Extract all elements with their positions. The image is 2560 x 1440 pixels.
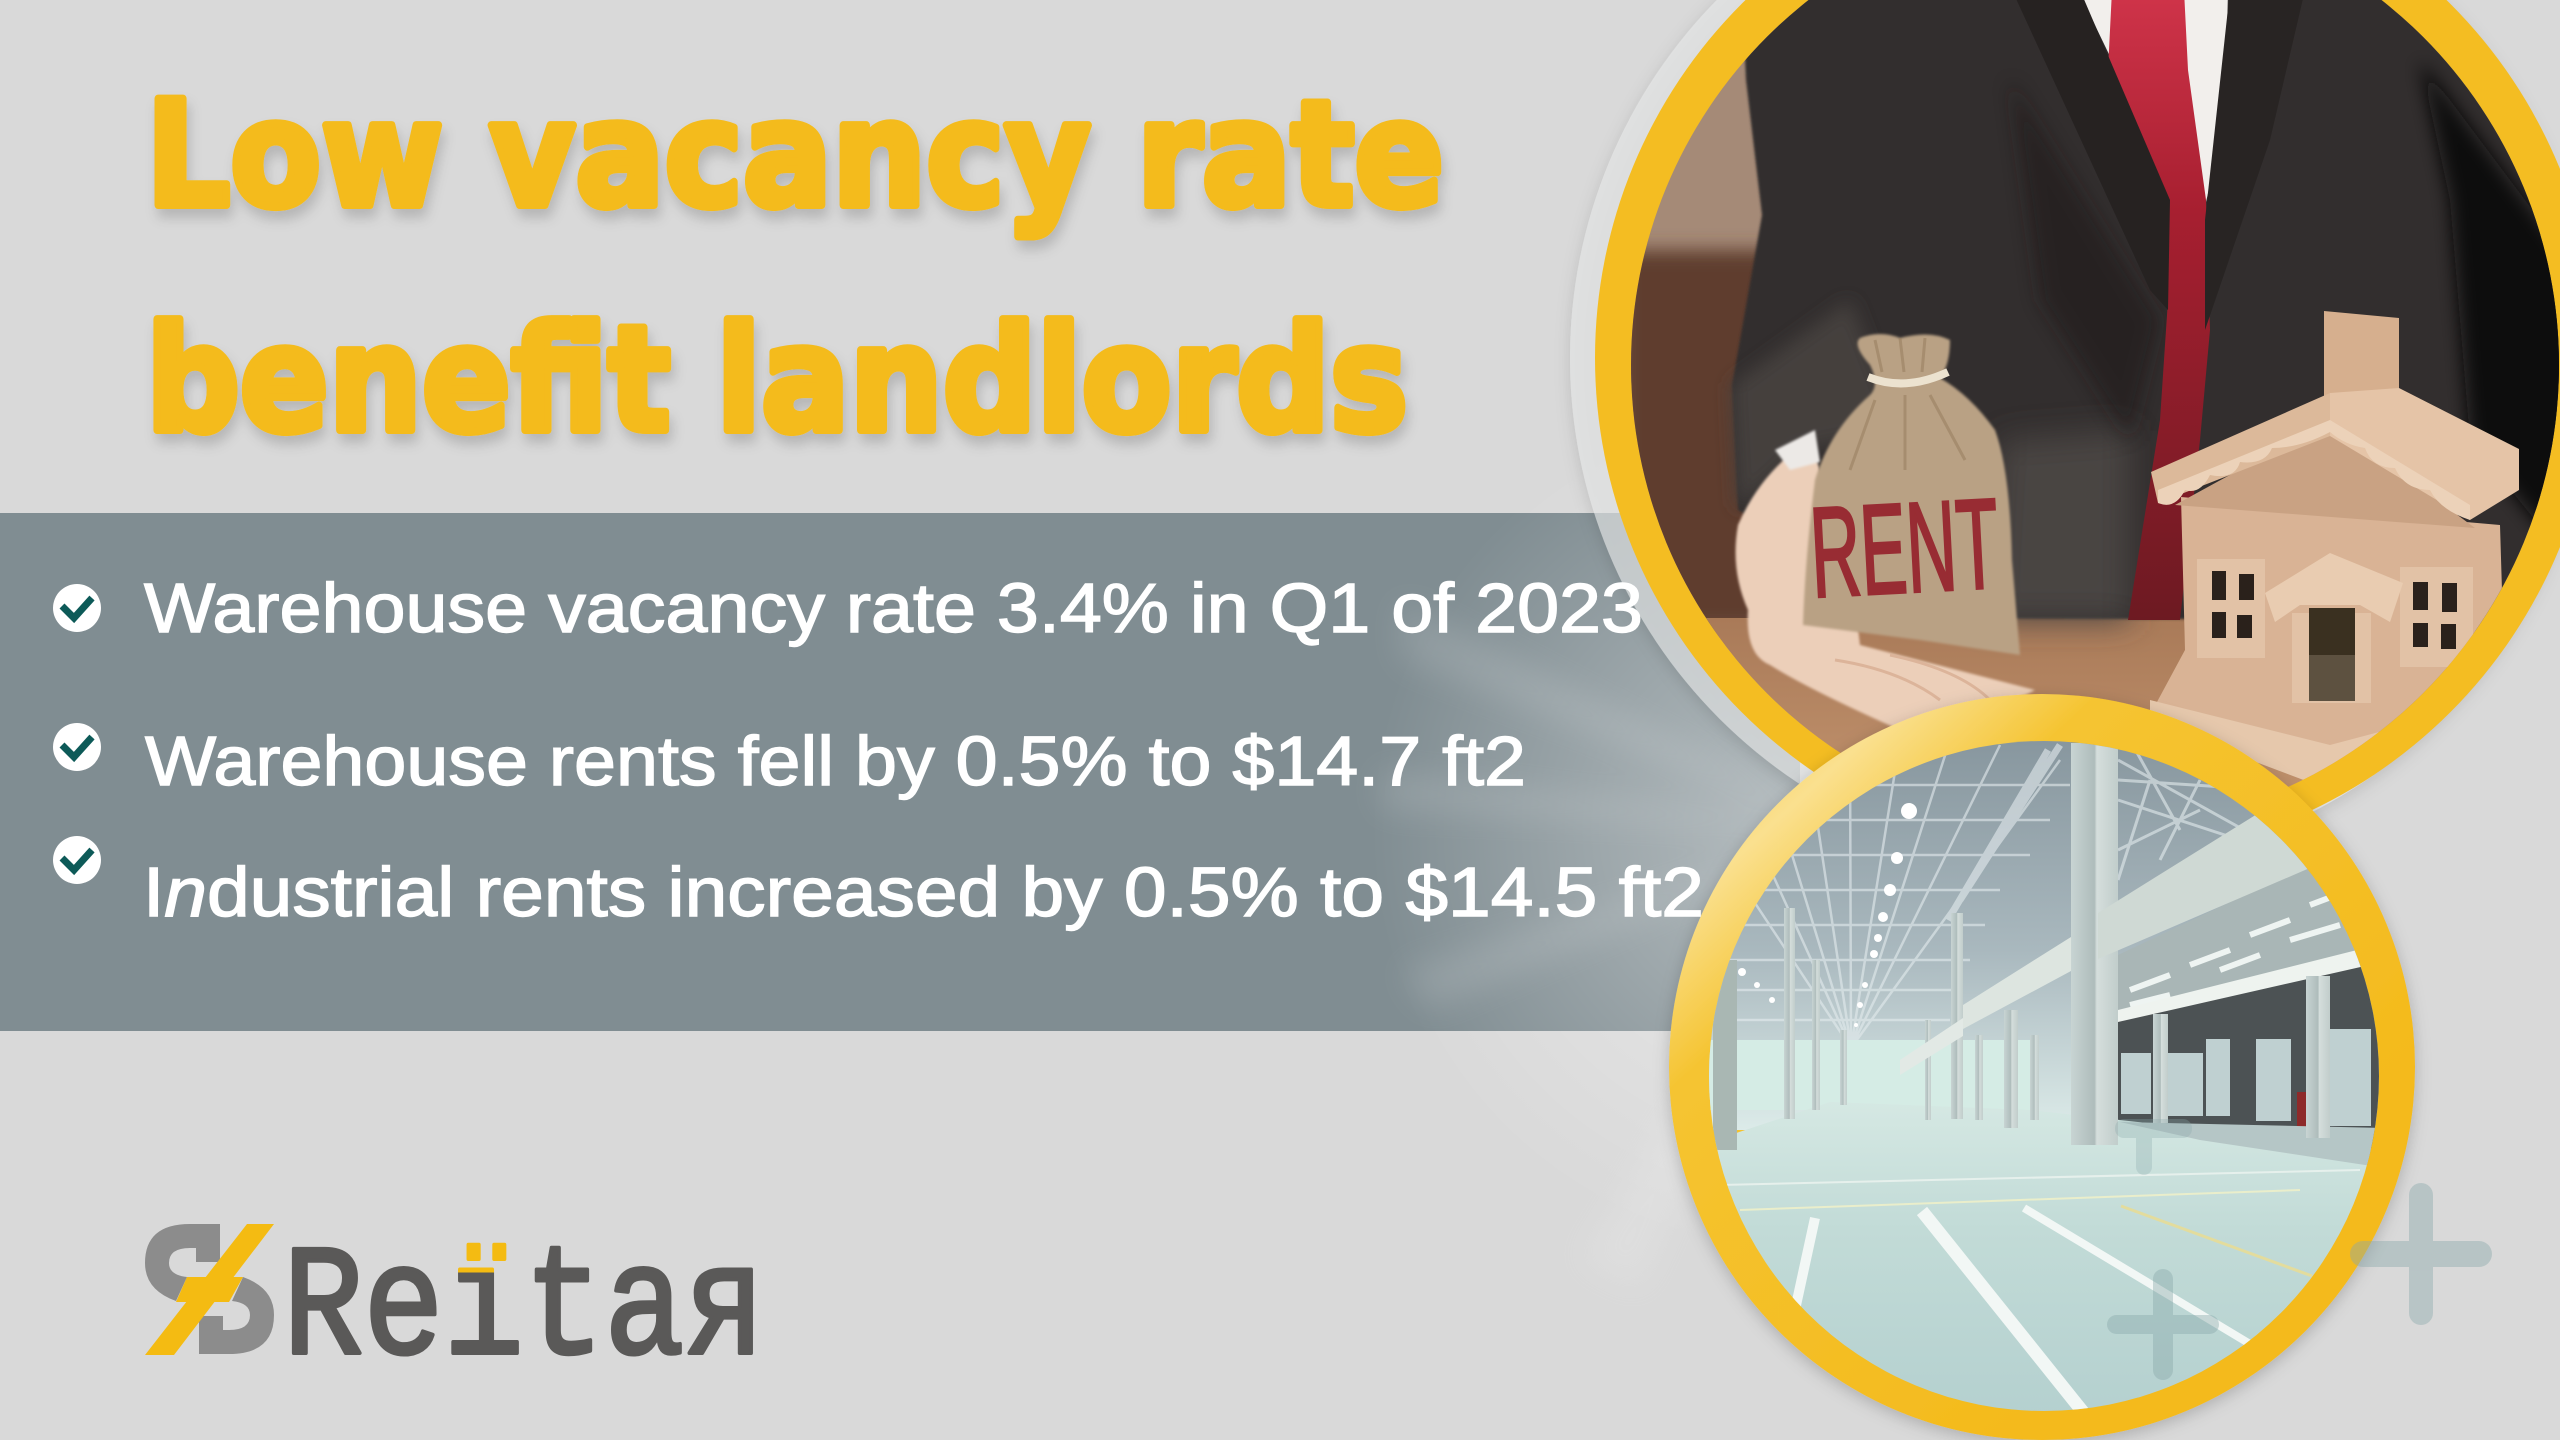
main photo ring	[1595, 0, 2560, 859]
logo	[145, 1222, 765, 1401]
floor markings	[1720, 1170, 2360, 1412]
red tie	[2108, 0, 2210, 620]
plus: large	[2350, 1183, 2492, 1325]
photo: businessman offering rent bag and model house	[1631, 0, 2559, 787]
blurred office background	[1590, 0, 2560, 750]
bullet 1: Warehouse vacancy rate 3.4% in Q1 of 2023	[144, 569, 1643, 647]
white shirt	[2078, 0, 2228, 215]
dark suit	[1732, 0, 2560, 650]
title: Low vacancy rate	[146, 70, 1444, 240]
ceiling lights	[1738, 803, 1917, 1027]
roof trusses	[1714, 743, 2239, 1040]
ceiling	[1700, 730, 2400, 1130]
door	[2265, 553, 2403, 703]
left window	[2197, 559, 2265, 658]
concrete beam	[1900, 806, 2340, 1075]
darker floor strip	[2120, 1122, 2385, 1168]
columns	[1713, 743, 2330, 1150]
roof scallops	[2158, 420, 2470, 520]
rent label: RENT	[1807, 472, 2002, 625]
chimney	[2324, 311, 2399, 400]
title: benefit landlords	[146, 295, 1408, 465]
right loading bay	[2118, 866, 2379, 1164]
panel: text band	[0, 513, 1800, 1031]
house body	[2150, 497, 2505, 790]
bullet 2: Warehouse rents fell by 0.5% to $14.7 ft2	[145, 722, 1526, 800]
house base	[2150, 700, 2379, 780]
warehouse photo ring	[1669, 694, 2415, 1440]
burlap rent bag	[1803, 334, 2020, 655]
fire extinguisher	[2297, 1092, 2315, 1133]
plus: medium	[2107, 1269, 2219, 1380]
bay wall	[2118, 961, 2379, 1164]
cardboard model house	[2150, 311, 2519, 790]
title	[146, 70, 1444, 465]
bay ceiling	[2118, 866, 2362, 1010]
crescent behind main photo	[1570, 0, 2560, 868]
gable wall	[2175, 436, 2474, 528]
light rays	[1350, 380, 2560, 1440]
right window	[2400, 567, 2473, 667]
bullet 3: Industrial rents increased by 0.5% to $14.5 ft2	[143, 853, 1704, 931]
roof	[2151, 393, 2330, 503]
hand	[1736, 430, 2035, 730]
bullet list	[53, 569, 1704, 931]
logo mark	[145, 1224, 274, 1355]
decorative plus signs	[2107, 1119, 2492, 1380]
bay ceiling lights	[2130, 890, 2350, 1005]
jacket lapels	[2012, 0, 2305, 330]
photo: empty warehouse interior	[1700, 730, 2400, 1420]
wooden table	[1706, 618, 2475, 787]
floor	[1700, 1102, 2385, 1420]
back wall	[1700, 1040, 2030, 1110]
loading doors	[2121, 1029, 2371, 1126]
bay lintel	[2118, 948, 2365, 1022]
logo wordmark: Reïtaя	[283, 1222, 765, 1401]
plus: faint	[2115, 1119, 2192, 1175]
